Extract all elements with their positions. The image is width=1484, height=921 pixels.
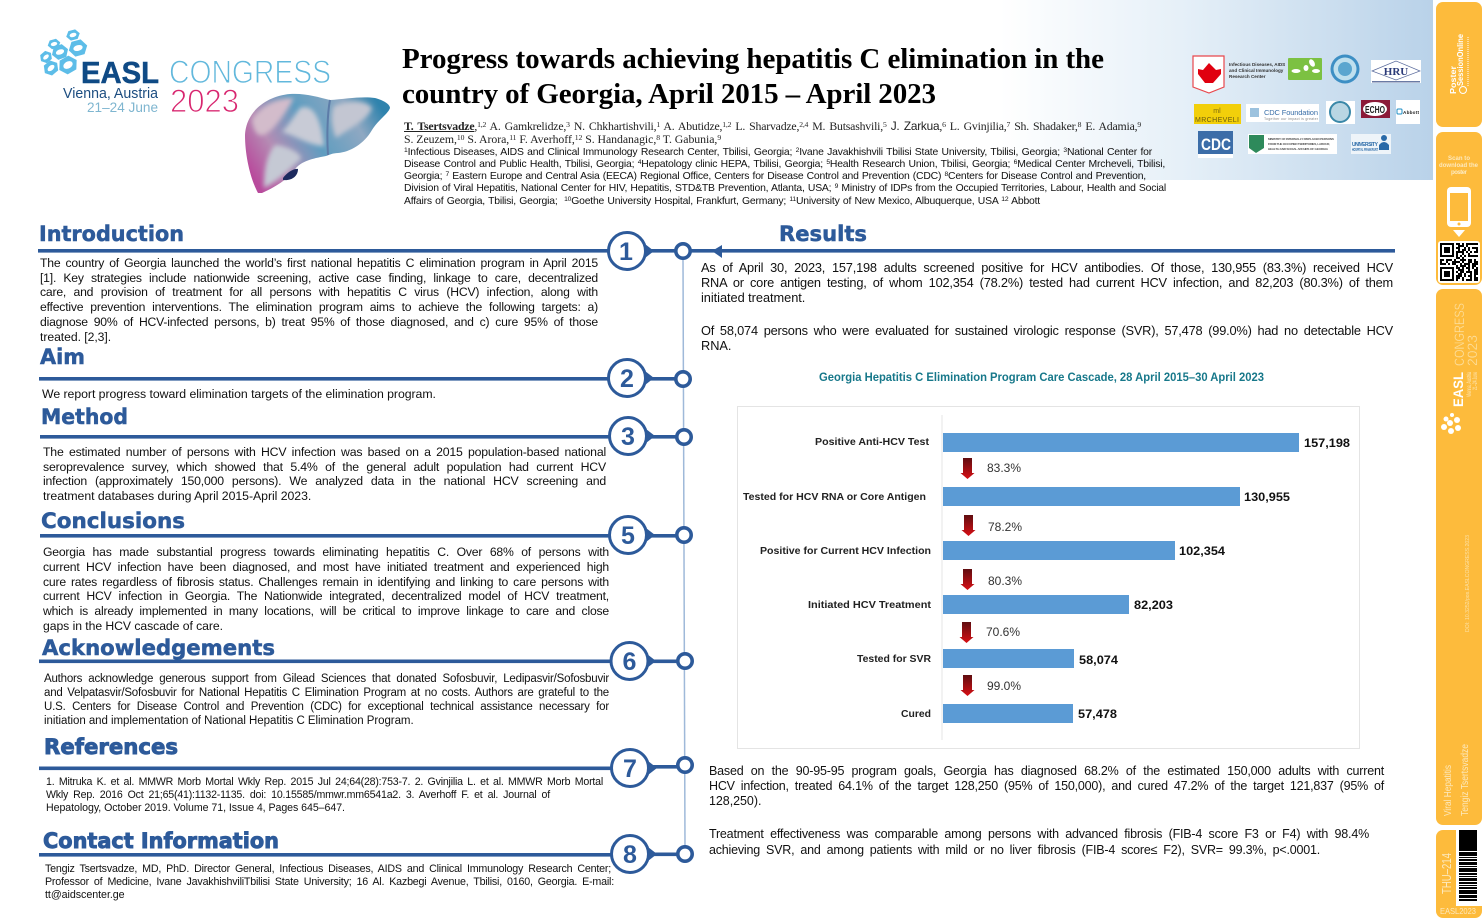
text: conclusions: gaps in the HCV cascade of care. [43,619,223,633]
text: acknowledgements: and Velpatasvir/Sofosbuvir for National Hepatitis C Elimination Program at no costs. Authors are grateful to the [44,687,609,699]
logo: EASL Congress 2023: CONGRESS [169,54,331,90]
bar: Tested for HCV RNA: Tested for HCV RNA or Core Antigen [743,492,926,503]
logo: research center shield: and Clinical Immunology [1229,68,1284,73]
logo: Ministry: MINISTRY OF INTERNALLY DISPLACED PERSONS [1268,137,1334,141]
section header: References: References [44,735,178,759]
logo: research center shield: Infectious Diseases, AIDS [1229,62,1285,67]
logo: HRU: HRU [1384,66,1408,78]
authors and affiliations: T. Tsertsvadze,1,2 A. Gamkrelidze,3 N. Chkhartishvili,1 A. Abutidze,1,2 L. Sharvadze,2,4 M. Butsashvili,5 J. Zarkua,6 L. Gvinjilia,7 Sh. Shadaker,8 E. Adamia,9 [404,119,1141,133]
header background band [0,0,1433,180]
badge 7: 7 [623,755,637,783]
logo: ECHO [1361,100,1390,118]
text: references: 1. Mitruka K. et al. MMWR Morb Mortal Wkly Rep. 2015 Jul 24;64(28):753-7. 2. Gvinjilia L. et al. MMWR Morb Mortal [46,776,603,788]
icon: small hexagons [1441,413,1461,434]
badge 6 [611,642,692,680]
arrow 70.6% [960,622,1020,643]
sponsor logos [1193,54,1421,158]
section header: Results: Results [779,222,867,246]
section header: Aim: Aim [40,345,85,369]
arrow 99.0%: 99.0% [987,679,1021,693]
text: SVR results [701,322,1394,352]
logo: University Hospital Frankfurt: UNIVERSITY [1352,142,1379,148]
sidebar panel: QR download: poster [1451,170,1468,176]
text: results summary: As of April 30, 2023, 157,198 adults screened positive for HCV antibodies. Of those, 130,955 (83.3%) received HCV [701,260,1393,274]
logo: CDC Foundation [1246,104,1319,122]
text: introduction: diagnose 90% of HCV-infected persons, b) treat 95% of those diagnosed, and c) cure 95% of those [40,315,598,329]
logo: circular emblem [1326,101,1355,124]
logo: CDC Foundation: Together our impact is greater [1264,117,1319,121]
sidebar panel: Poster Session Online [1436,2,1482,127]
text: SVR results: Of 58,074 persons who were evaluated for sustained virologic response (SVR), 57,478 (99.0%) had no detectable HCV [701,322,1393,338]
title: country of Georgia, April 2015 – April 2023 [402,78,936,110]
arrow 80.3% [960,569,1022,590]
logo: research center shield: Research Center [1229,74,1266,79]
text: acknowledgements: U.S. Centers for Disease Control and Prevention (CDC) for exceptional technical assistance necessary for [44,701,609,713]
text: treatment effectiveness: achieving SVR, and among patients with mild or no liver fibrosis (FIB-4 score≤ F2), SVR= 99.3%, p<.0001. [709,843,1320,857]
badge 6: 6 [623,648,636,676]
sidebar [1436,2,1484,918]
section header: Results [690,222,1395,258]
QR code [1438,241,1480,283]
sidebar panel: congress info: Tengiz Tsertsvadze [1459,744,1471,816]
bar: Positive for Current HCV Infection: 102,354 [1179,544,1225,558]
text: results summary [701,260,1394,304]
arrow 70.6%: 70.6% [986,625,1020,639]
text: program goals: 128,250). [709,794,761,808]
arrow 83.3%: 83.3% [987,461,1021,475]
text: method: treatment databases during April 2015-April 2023. [43,489,311,503]
logo: HRU [1371,60,1421,83]
text: contact information: tt@aidscenter.ge [45,889,125,901]
section header: Aim [39,345,690,396]
logo: University Hospital Frankfurt: HOSPITAL FRANKFURT [1352,147,1378,152]
text: conclusions: cure rates regardless of fibrosis status. Challenges remain in identifying and linking to care persons with [43,575,609,589]
icon: phone [1447,187,1471,227]
section header: Introduction: Introduction [39,222,184,246]
bar: Initiated HCV Treatment [808,595,1173,614]
text: introduction: care, and provision of treatment for all persons with hepatitis C virus (HCV) infection, along with [40,285,598,299]
bar: Tested for SVR: Tested for SVR [857,654,931,665]
logo: Mrcheveli: ml [1213,108,1221,115]
logo: Mrcheveli: MRCHEVELI [1195,117,1239,124]
badge 3: 3 [621,423,635,451]
text: program goals: Based on the 90-95-95 program goals, Georgia has diagnosed 68.2% of the estimated 150,000 adults with current [709,764,1384,778]
text: introduction: treated. [2,3]. [40,330,111,344]
sidebar panel: congress info: 2023 [1464,335,1480,366]
bar: Positive Anti-HCV Test [815,433,1350,452]
badge 1: 1 [619,238,633,266]
sidebar panel: congress info: DOI: 10.3252/pos.EASLCONGRESS.2023 [1465,535,1471,632]
text: references: Wkly Rep. 2016 Oct 21;65(41):1132-1135. doi: 10.15585/mmwr.mm6541a2. 3. Averhoff F. et al. Journal of [46,789,550,801]
bar: Tested for SVR: 58,074 [1079,653,1118,667]
arrow 78.2%: 78.2% [988,520,1022,534]
text: contact information [45,863,614,901]
badge 3 [610,418,691,454]
logo: EASL Congress 2023: 21–24 June [87,99,158,115]
section header: Acknowledgements [39,636,692,680]
logo: CDC [1198,131,1233,158]
arrow 80.3%: 80.3% [988,574,1022,588]
text: method: infection (approximately 150,000 persons). We analyzed data in the national HCV screening and [43,474,606,488]
logo: Ministry: FROM THE OCCUPIED TERRITORIES, LABOUR, [1268,142,1330,146]
badge 5 [610,516,691,554]
title: Progress towards achieving hepatitis C elimination in the [402,43,1104,75]
logo: Mrcheveli [1194,104,1241,124]
sidebar panel: congress info: Vienna, Austria [1467,372,1473,397]
text: conclusions: Georgia has made substantial progress towards eliminating hepatitis C. Over 68% of persons with [43,545,609,559]
authors and affiliations: Affairs of Georgia, Tbilisi, Georgia; 10Goethe University Hospital, Frankfurt, Germany; 11University of New Mexico, Albuquerque, USA 12 Abbott [404,196,1040,207]
text: conclusions: current HCV infection have been diagnosed, and most have initiated treatment and experienced high [43,560,609,574]
text: treatment effectiveness [709,827,1369,857]
bar: Tested for SVR [857,649,1118,668]
authors and affiliations [404,119,1166,207]
text: program goals [709,764,1384,808]
arrow 78.2% [962,515,1022,536]
text: program goals: HCV infection, treated 64.1% of the target 128,250 (95% of 150,000), and cured 47.2% of the target 121,837 (95% of [709,779,1384,793]
authors and affiliations: Georgia; 7 Eastern Europe and Central Asia (EECA) Regional Office, Centers for Disease Control and Prevention (CDC) 8Centers for Disease Control and Prevention, [404,171,1146,182]
badge 7 [612,750,692,786]
logo: green [1288,58,1322,80]
sidebar panel: congress info: CONGRESS [1451,303,1467,366]
section header: Method [40,405,691,454]
timeline connector [683,258,685,848]
logo: EASL Congress 2023: 2023 [170,83,239,119]
sidebar panel: Poster Session Online: Poster [1449,66,1458,94]
text: SVR results: RNA. [701,338,731,352]
sidebar panel: congress info: 21–24 June [1473,372,1479,390]
arrow 99.0% [960,675,1021,696]
text: introduction [40,256,598,344]
logo: CDC Foundation: CDC Foundation [1264,108,1318,117]
logo: CDC: CDC [1201,135,1231,154]
sidebar panel: congress info: EASL [1450,372,1466,407]
icon: liver illustration [245,94,390,193]
bar: Initiated HCV Treatment: 82,203 [1134,598,1173,612]
authors and affiliations: Disease Control and Public Health, Tbilisi, Georgia; 4Hepatology clinic HEPA, Tbilisi, Georgia; 5Health Research Union, Tbilisi, Georgia; 6Medical Center Mrcheveli, Tbilisi, [404,159,1165,170]
bar: Cured [901,704,1117,723]
text: acknowledgements: initiation and implementation of National Hepatitis C Elimination Program. [44,715,414,727]
text: references: Hepatology, October 2019. Volume 71, Issue 4, Pages 645–647. [46,802,345,814]
logo: university seal [1330,54,1360,84]
sidebar panel: poster number and barcode: EASL2023 [1440,906,1476,916]
text: introduction: The country of Georgia launched the world’s first national hepatitis C elimination program in April 2015 [40,256,598,270]
bar: Positive Anti-HCV Test: Positive Anti-HCV Test [815,437,930,448]
badge 5: 5 [621,522,635,550]
text: method: seroprevalence survey, which showed that 5.4% of the general adult population had current HCV [43,460,606,474]
text: method [43,445,606,503]
section header: Conclusions: Conclusions [41,509,185,533]
section header: Acknowledgements: Acknowledgements [42,636,275,660]
bar chart: care cascade [738,406,1360,748]
logo: research center shield [1193,56,1285,93]
chart title: Georgia Hepatitis C Elimination Program Care Cascade, 28 April 2015–30 April 2023 [819,372,1264,384]
section header: References [39,735,692,786]
authors and affiliations: S. Zeuzem,10 S. Arora,11 F. Averhoff,12 S. Handanagic,8 T. Gabunia,9 [404,132,721,146]
text: conclusions: current HCV infection in Georgia. The Nationwide integrated, decentralized model of HCV treatment, [43,589,609,603]
text: conclusions: which is already implemented in many locations, will be critical to improve linkage to care and close [43,604,609,618]
bar: Positive for Current HCV Infection: Positive for Current HCV Infection [760,546,931,557]
logo: University Hospital Frankfurt [1351,134,1391,154]
section header: Method: Method [41,405,128,429]
sidebar panel: Poster Session Online: SessionOnline [1456,33,1465,86]
logo: EASL Congress 2023: Vienna, Austria [63,86,159,102]
sidebar panel: poster number and barcode: THU–214 [1439,853,1454,894]
text: contact information: Professor of Medicine, Ivane JavakhishviliTbilisi State University; 16 Al. Kazbegi Avenue, Tbilisi, 0160, Georgia. E-mail: [45,876,614,888]
logo: Abbott [1396,100,1420,124]
text: acknowledgements: Authors acknowledge generous support from Gilead Sciences that donated Sofosbuvir, Ledipasvir/Sofosbuvir [44,673,609,685]
sidebar panel: congress info: Viral Hepatitis [1442,765,1454,816]
section header: Introduction [38,222,690,270]
badge 2: 2 [620,365,634,393]
bar: Cured: 57,478 [1078,707,1117,721]
arrow 83.3% [960,458,1021,479]
bar: Tested for HCV RNA [743,487,1290,506]
authors and affiliations: 1Infectious Diseases, AIDS and Clinical Immunology Research Center, Tbilisi, Georgia; 2Ivane Javakhishvili Tbilisi State University, Tbilisi, Georgia; 3National Center for [404,147,1152,158]
bar: Cured: Cured [901,709,931,720]
logo: ECHO: ECHO [1365,105,1385,116]
sidebar panel: QR download: download the [1439,163,1479,169]
text: aim: We report progress toward elimination targets of the elimination program. [42,387,436,401]
text: results summary: initiated treatment. [701,290,805,304]
text: conclusions [43,545,609,633]
text: contact information: Tengiz Tsertsvadze, MD, PhD. Director General, Infectious Diseases, AIDS and Clinical Immunology Research Center; [45,863,611,875]
section header: Contact Information [39,829,692,872]
logo: Abbott: Abbott [1403,110,1419,115]
sidebar panel: poster number and barcode [1436,829,1484,918]
section header: Contact Information: Contact Information [43,829,279,853]
bar: Initiated HCV Treatment: Initiated HCV Treatment [808,600,932,611]
text: references [46,776,603,814]
logo: Ministry [1248,134,1337,154]
logo: Ministry: HEALTH AND SOCIAL AFFAIRS OF GEORGIA [1268,147,1329,151]
badge 1 [608,232,690,270]
text: method: The estimated number of persons with HCV infection was based on a 2015 population-based national [43,445,606,459]
logo: EASL Congress 2023 [38,28,331,119]
sidebar panel: QR download: Scan to [1448,156,1470,162]
text: acknowledgements [44,673,609,727]
icon: hexagon cluster [38,28,89,78]
badge 8 [612,836,692,872]
text: results summary: RNA or core antigen testing, of whom 102,354 (78.2%) tested had current HCV infection, and 82,203 (80.3%) of them [701,274,1393,290]
badge 2 [608,360,690,396]
text: introduction: [1]. Key strategies include nationwide screening, active case finding, linkage to care, decentralized [40,271,598,285]
section header: Conclusions [40,509,691,554]
bar: Tested for HCV RNA: 130,955 [1244,490,1290,504]
logo: EASL Congress 2023: EASL [81,55,159,90]
text: introduction: effective prevention interventions. The elimination program aims to achieve the following targets: a) [40,300,598,314]
sidebar panel: congress info [1436,289,1482,825]
bar: Positive Anti-HCV Test: 157,198 [1304,436,1350,450]
authors and affiliations: Division of Viral Hepatitis, National Center for HIV, Hepatitis, STD&TB Prevention, Atlanta, USA; 9 Ministry of IDPs from the Occupied Territories, Labour, Health and Social [404,183,1166,194]
bar: Positive for Current HCV Infection [760,541,1225,560]
text: treatment effectiveness: Treatment effectiveness was comparable among persons with advanced fibrosis (FIB-4 score F3 or F4) with 98.4% [709,827,1369,841]
title [402,43,1104,110]
sidebar panel: QR download [1436,132,1482,285]
badge 8: 8 [623,841,637,869]
